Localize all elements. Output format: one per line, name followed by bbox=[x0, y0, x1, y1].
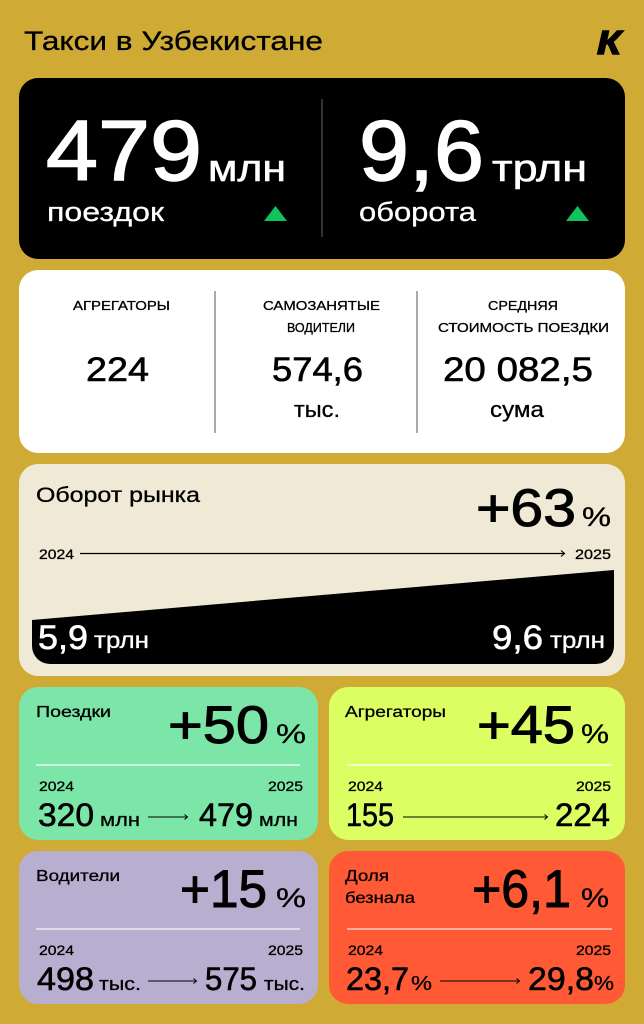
panel: headline totals bbox=[19, 78, 625, 259]
card: trips: +50 bbox=[168, 696, 269, 755]
panel: market stats bbox=[19, 270, 625, 453]
stat: self-employed drivers bbox=[263, 298, 380, 422]
card: aggregators: % bbox=[581, 719, 609, 749]
stat: average trip cost: сума bbox=[490, 397, 545, 422]
card: aggregators: Агрегаторы bbox=[345, 704, 446, 721]
card: cashless share: 2024 bbox=[348, 942, 383, 958]
timeline arrow: 2024 bbox=[39, 546, 74, 562]
card: trips: млн bbox=[259, 810, 298, 830]
timeline arrow bbox=[39, 546, 611, 562]
stat: self-employed drivers: САМОЗАНЯТЫЕ bbox=[263, 298, 380, 313]
card: drivers: Водители bbox=[36, 868, 120, 885]
trips total: 479 bbox=[46, 104, 202, 199]
trips total: млн bbox=[208, 148, 286, 190]
turnover total bbox=[359, 104, 589, 227]
turnover total: 9,6 bbox=[359, 104, 484, 199]
timeline arrow: 2025 bbox=[575, 546, 611, 562]
card: drivers: 575 bbox=[205, 961, 257, 997]
card: cashless share: % bbox=[411, 973, 432, 995]
card: aggregators: 224 bbox=[555, 797, 610, 833]
card: aggregators: 155 bbox=[346, 797, 394, 833]
stat: self-employed drivers: 574,6 bbox=[272, 351, 363, 389]
card: cashless share: 23,7 bbox=[346, 961, 409, 997]
card: aggregators: 2024 bbox=[348, 778, 383, 794]
card: drivers: тыс. bbox=[264, 974, 305, 994]
heading: market turnover: Оборот рынка bbox=[36, 484, 200, 507]
card: cashless share: Доля bbox=[345, 868, 389, 885]
stat: aggregators: 224 bbox=[86, 351, 149, 389]
logo: К bbox=[597, 24, 624, 61]
card: trips bbox=[19, 687, 318, 840]
wedge chart: 5,9 bbox=[38, 619, 88, 657]
card: trips: 2025 bbox=[268, 778, 303, 794]
panel: market turnover bbox=[19, 464, 625, 676]
stat: average trip cost: СТОИМОСТЬ ПОЕЗДКИ bbox=[438, 320, 609, 335]
card: drivers bbox=[19, 851, 318, 1004]
card: trips: 320 bbox=[38, 797, 94, 833]
stat: aggregators: АГРЕГАТОРЫ bbox=[73, 298, 170, 313]
card: trips: 479 bbox=[199, 797, 253, 833]
card: aggregators: 2025 bbox=[576, 778, 611, 794]
growth figure: % bbox=[582, 502, 611, 532]
card: cashless share: 29,8 bbox=[528, 961, 594, 997]
card: cashless share: безнала bbox=[345, 890, 415, 907]
wedge chart: 9,6 bbox=[492, 619, 543, 657]
stat: aggregators bbox=[73, 298, 170, 389]
card: cashless share: 2025 bbox=[576, 942, 611, 958]
card: trips: % bbox=[276, 719, 306, 749]
trips total bbox=[46, 104, 287, 227]
card: trips: 2024 bbox=[39, 778, 74, 794]
card: drivers: тыс. bbox=[99, 974, 141, 994]
trips total: поездок bbox=[47, 197, 164, 227]
stat: average trip cost: 20 082,5 bbox=[443, 351, 593, 389]
wedge chart: трлн bbox=[550, 627, 605, 653]
growth figure bbox=[476, 479, 611, 538]
stat: average trip cost bbox=[438, 298, 609, 422]
card: drivers: 2025 bbox=[268, 942, 303, 958]
card: aggregators: +45 bbox=[477, 696, 575, 755]
wedge chart: трлн bbox=[94, 627, 149, 653]
card: cashless share: +6,1 bbox=[472, 860, 571, 919]
card: trips: Поездки bbox=[36, 704, 111, 721]
card: trips: млн bbox=[100, 810, 140, 830]
card: drivers: 498 bbox=[37, 961, 94, 997]
wedge chart bbox=[32, 570, 614, 664]
turnover total: оборота bbox=[359, 197, 477, 227]
card: drivers: +15 bbox=[180, 860, 267, 919]
card: aggregators bbox=[329, 687, 625, 840]
card: cashless share: % bbox=[594, 973, 614, 995]
card: cashless share: % bbox=[581, 883, 609, 913]
turnover total: трлн bbox=[492, 148, 587, 190]
card: drivers: 2024 bbox=[39, 942, 74, 958]
stat: average trip cost: СРЕДНЯЯ bbox=[488, 298, 558, 313]
card: drivers: % bbox=[276, 883, 306, 913]
stat: self-employed drivers: тыс. bbox=[294, 397, 340, 422]
title: Такси в Узбекистане bbox=[24, 26, 323, 56]
card: cashless share bbox=[329, 851, 625, 1004]
growth figure: +63 bbox=[476, 479, 576, 538]
stat: self-employed drivers: ВОДИТЕЛИ bbox=[287, 320, 355, 335]
